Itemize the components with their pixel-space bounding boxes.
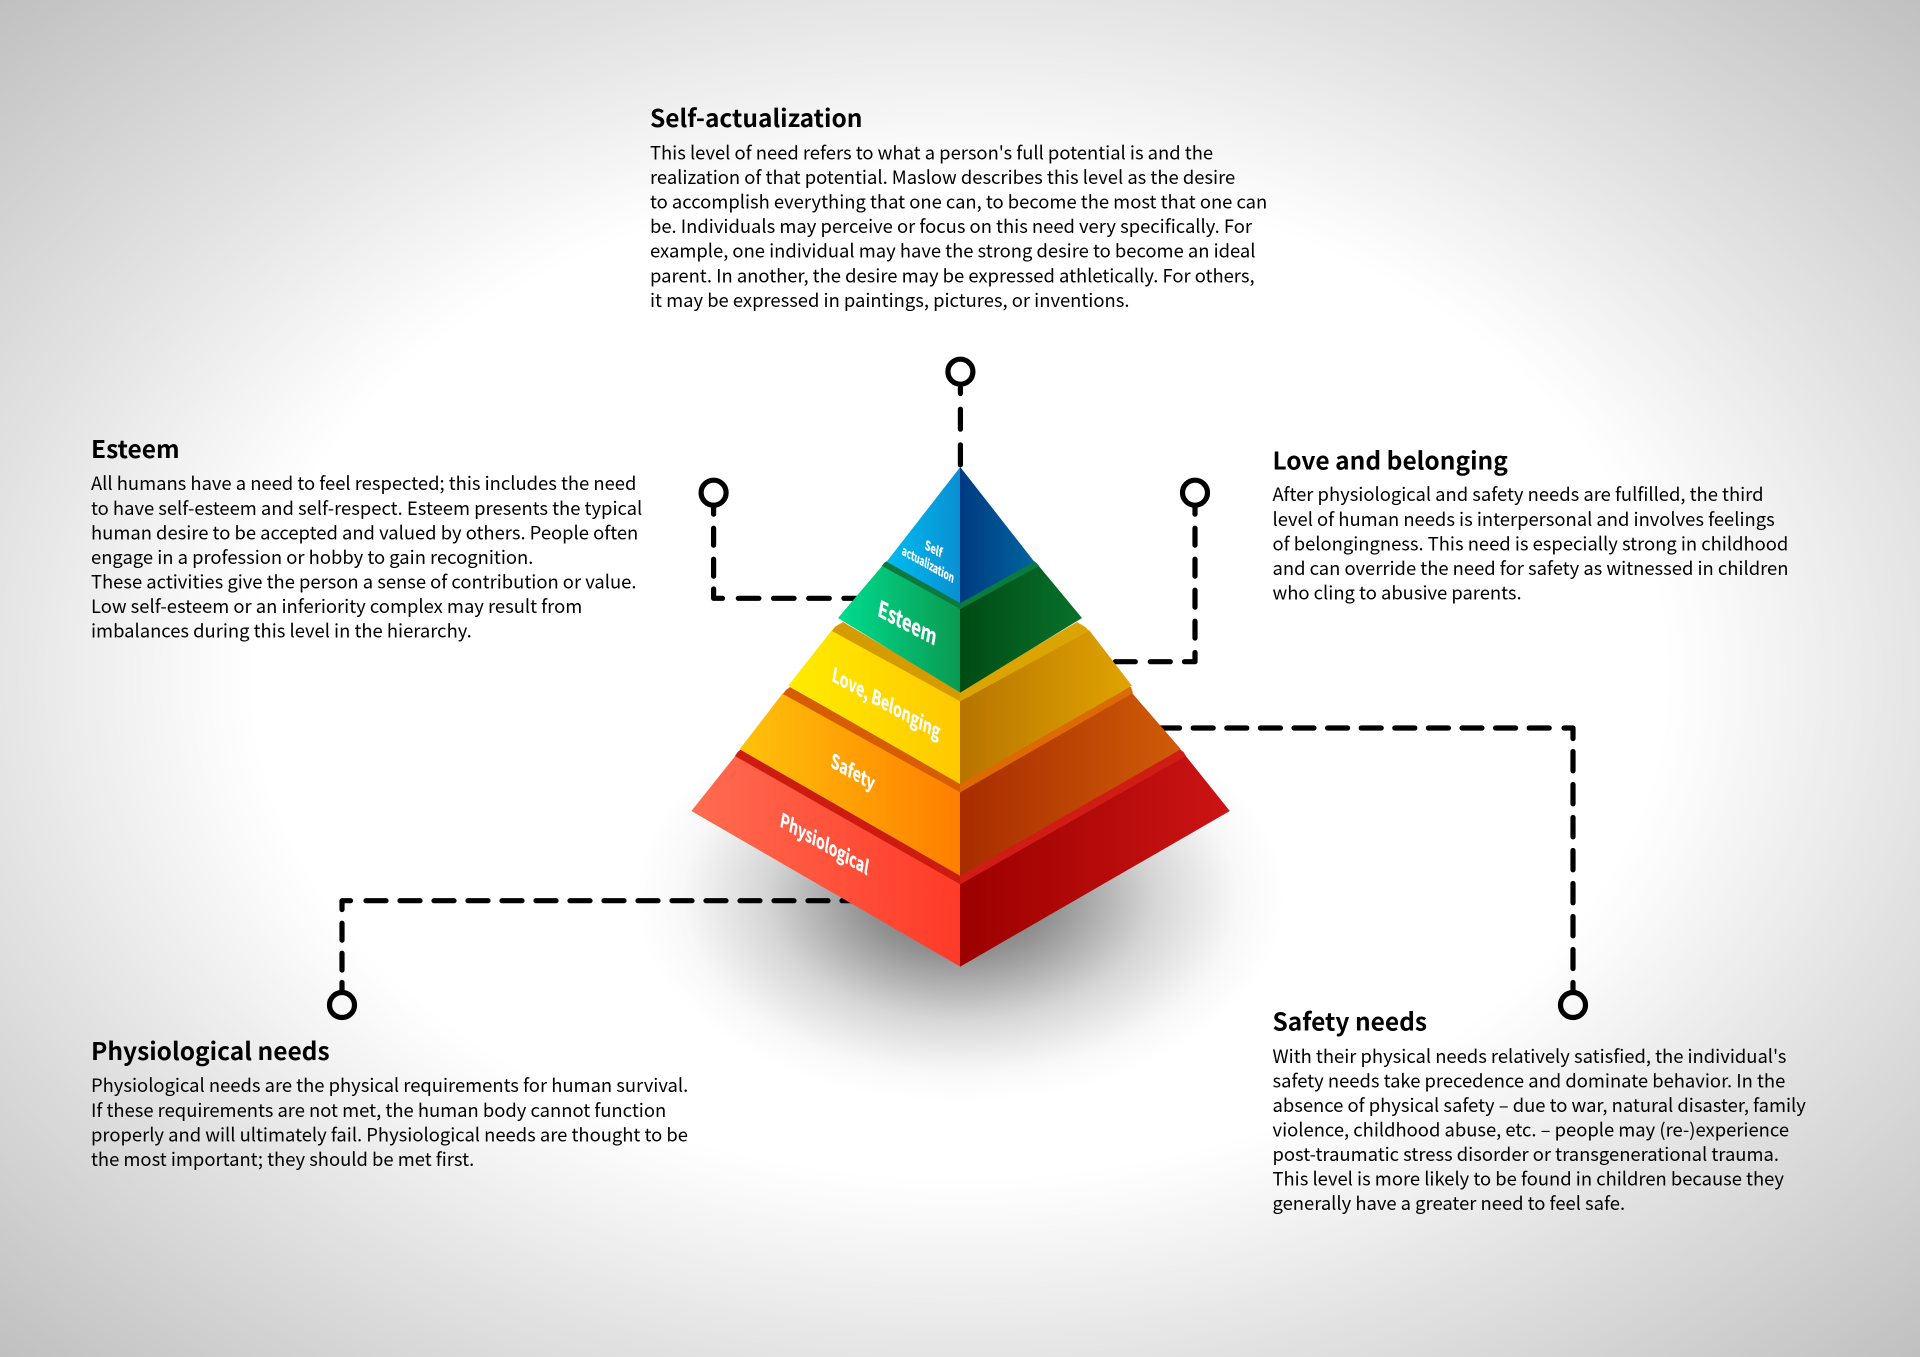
text block: esteem: to have self-esteem and self-respect. Esteem presents the typical bbox=[91, 495, 642, 521]
text block: self-actualization: be. Individuals may perceive or focus on this need very specifically. For bbox=[650, 213, 1253, 239]
pyramid shadow bbox=[635, 692, 1285, 1102]
text block: love and belonging: who cling to abusive parents. bbox=[1272, 579, 1522, 605]
text block: self-actualization: realization of that potential. Maslow describes this level as the desire bbox=[650, 164, 1235, 190]
connector: physiological bbox=[330, 901, 855, 1018]
text block: love and belonging: After physiological and safety needs are fulfilled, the third bbox=[1272, 481, 1764, 507]
text block: safety needs: absence of physical safety – due to war, natural disaster, family bbox=[1272, 1092, 1806, 1118]
text block: esteem: All humans have a need to feel respected; this includes the need bbox=[91, 470, 636, 496]
level: physiological bbox=[691, 749, 1230, 967]
label: physiological: Physiological bbox=[778, 805, 871, 882]
level: love and belonging bbox=[788, 622, 1132, 784]
text block: self-actualization: This level of need refers to what a person's full potential is and the bbox=[650, 140, 1213, 166]
text block: love and belonging: of belongingness. This need is especially strong in childhood bbox=[1272, 530, 1788, 556]
text block: safety needs: post-traumatic stress disorder or transgenerational trauma. bbox=[1272, 1141, 1779, 1167]
level: safety bbox=[740, 687, 1181, 876]
text block: safety needs: With their physical needs relatively satisfied, the individual's bbox=[1272, 1043, 1786, 1069]
level: self-actualization bbox=[887, 467, 1034, 603]
text block: physiological needs bbox=[91, 1033, 688, 1172]
text block: esteem: Low self-esteem or an inferiority complex may result from bbox=[91, 593, 582, 619]
text block: self-actualization: parent. In another, the desire may be expressed athletically. For others, bbox=[650, 262, 1255, 288]
text block: self-actualization: it may be expressed in paintings, pictures, or inventions. bbox=[650, 287, 1129, 313]
connector: self-actualization bbox=[948, 359, 973, 470]
text block: love and belonging: level of human needs is interpersonal and involves feelings bbox=[1272, 506, 1775, 532]
text block: self-actualization: Self-actualization bbox=[650, 100, 862, 135]
text block: esteem: engage in a profession or hobby to gain recognition. bbox=[91, 544, 533, 570]
label: self actualization: Self bbox=[923, 536, 944, 563]
text block: safety needs: generally have a greater need to feel safe. bbox=[1272, 1190, 1625, 1216]
text block: esteem: Esteem bbox=[91, 431, 180, 466]
text block: safety needs bbox=[1272, 1004, 1806, 1216]
text block: self-actualization: to accomplish everything that one can, to become the most that one can bbox=[650, 189, 1267, 215]
text block: esteem: These activities give the person a sense of contribution or value. bbox=[91, 568, 636, 594]
text block: safety needs: safety needs take precedence and dominate behavior. In the bbox=[1272, 1067, 1785, 1093]
text block: safety needs: Safety needs bbox=[1272, 1004, 1427, 1039]
text block: physiological needs: properly and will ultimately fail. Physiological needs are thought to be bbox=[91, 1121, 688, 1147]
label: safety: Safety bbox=[829, 746, 877, 797]
text block: esteem: imbalances during this level in the hierarchy. bbox=[91, 618, 472, 644]
text block: safety needs: This level is more likely to be found in children because they bbox=[1272, 1166, 1784, 1192]
text block: esteem: human desire to be accepted and valued by others. People often bbox=[91, 519, 638, 545]
pyramid bbox=[691, 467, 1230, 967]
text block: love and belonging: Love and belonging bbox=[1272, 442, 1508, 478]
text block: esteem bbox=[91, 431, 642, 644]
text block: love and belonging bbox=[1272, 442, 1788, 605]
text block: self-actualization bbox=[650, 100, 1267, 313]
level: esteem bbox=[838, 561, 1082, 693]
label: love, belonging: Love, Belonging bbox=[830, 660, 943, 746]
label: self actualization: actualization bbox=[901, 541, 956, 588]
text block: physiological needs: Physiological needs are the physical requirements for human survival. bbox=[91, 1072, 688, 1098]
connector: safety bbox=[1150, 728, 1586, 1018]
text block: physiological needs: the most important; they should be met first. bbox=[91, 1146, 474, 1172]
connector: love and belonging bbox=[1105, 480, 1208, 662]
text block: love and belonging: and can override the need for safety as witnessed in children bbox=[1272, 555, 1788, 581]
text block: safety needs: violence, childhood abuse, etc. – people may (re-)experience bbox=[1272, 1116, 1789, 1142]
connector: esteem bbox=[701, 480, 862, 598]
text block: physiological needs: Physiological needs bbox=[91, 1033, 330, 1068]
text block: self-actualization: example, one individual may have the strong desire to become an ideal bbox=[650, 238, 1256, 264]
label: esteem: Esteem bbox=[876, 590, 940, 652]
text block: physiological needs: If these requirements are not met, the human body cannot function bbox=[91, 1097, 666, 1123]
